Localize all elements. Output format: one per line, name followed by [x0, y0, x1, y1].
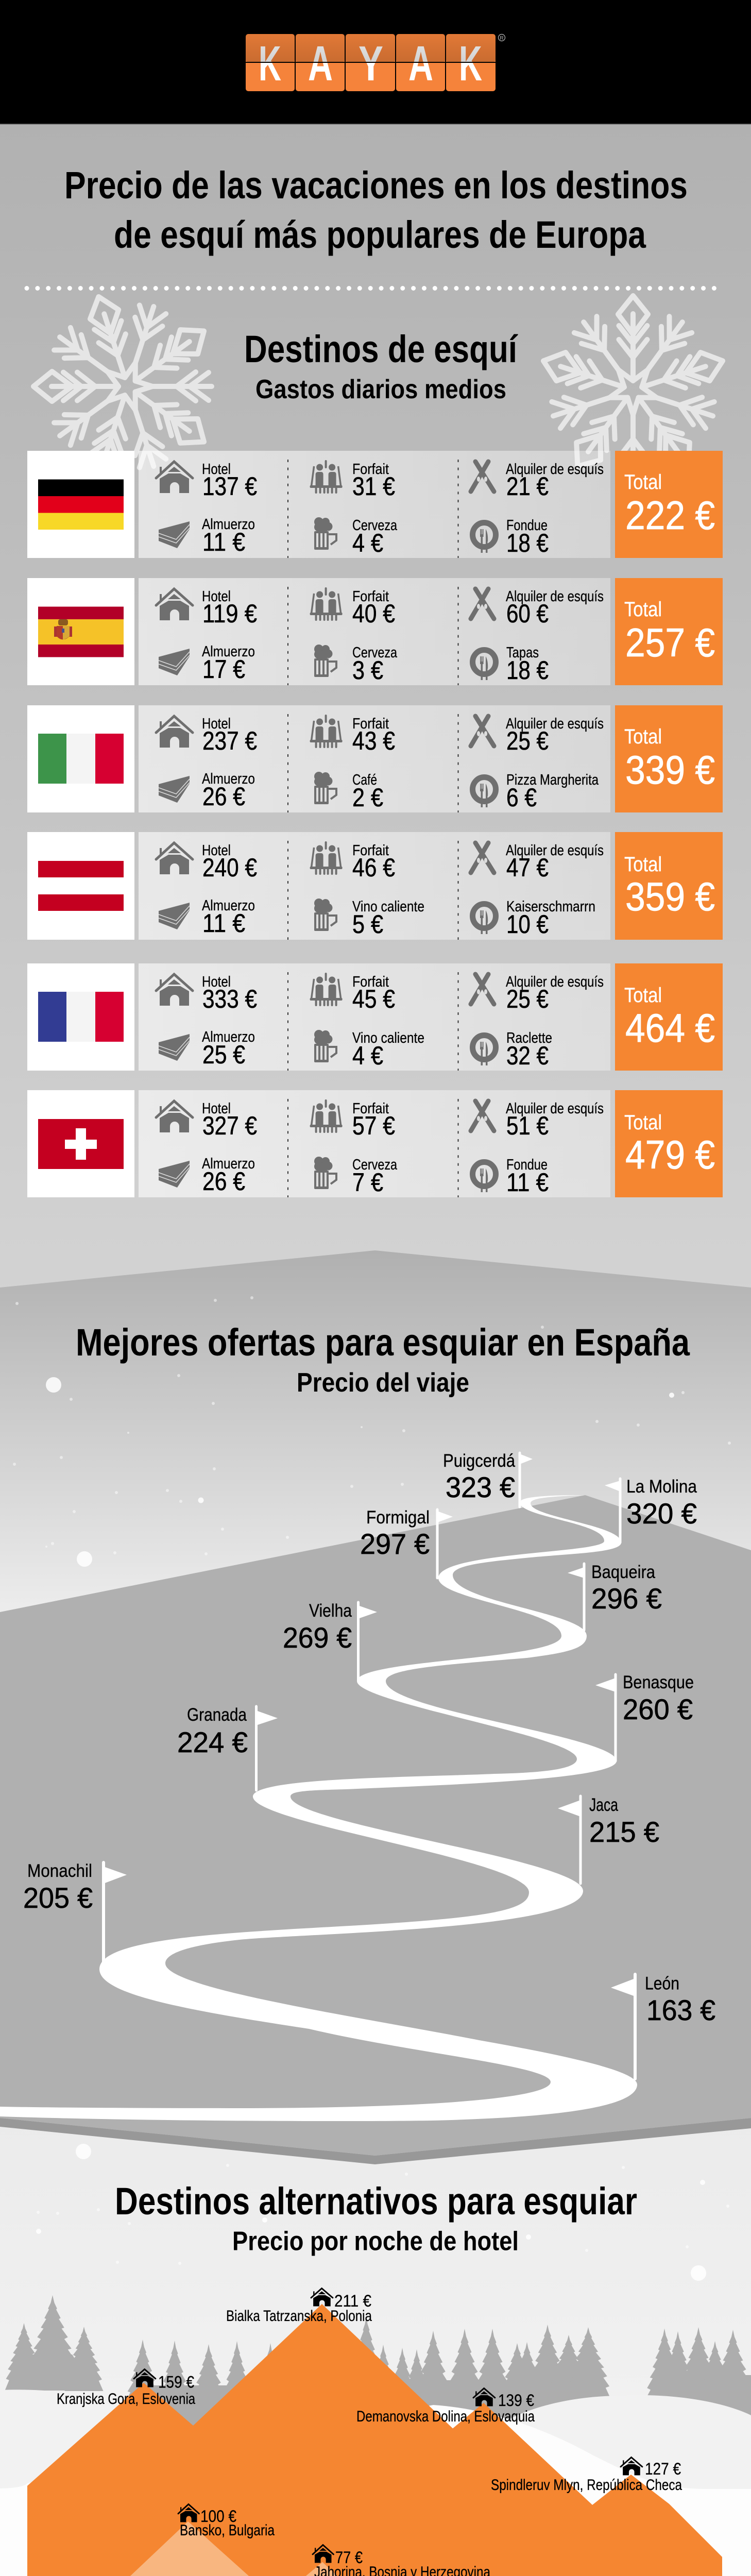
flag: Germany	[38, 479, 124, 530]
heading: alternative destinations	[115, 2180, 637, 2257]
logo: KAYAK tiles: Y	[359, 36, 383, 91]
row: Germany: 4 €	[352, 529, 383, 557]
row: Germany: 18 €	[506, 529, 549, 557]
row: Spain: Almuerzo	[202, 643, 255, 660]
row: France: Forfait	[352, 974, 389, 990]
row: Austria: Kaiserschmarrn	[506, 899, 595, 915]
row: Austria: 47 €	[506, 853, 549, 882]
flag: Baqueira	[568, 1562, 662, 1630]
row: Spain: Alquiler de esquís	[506, 588, 604, 605]
price: Demanovska Dolina: 139 €	[498, 2391, 534, 2410]
row: Switzerland: 26 €	[202, 1167, 245, 1196]
row: Germany: Hotel	[202, 461, 231, 478]
row: Italy	[27, 705, 723, 812]
price: Spindleruv Mlyn: Spindleruv Mlyn, República Checa	[491, 2477, 682, 2494]
total: France	[615, 963, 723, 1071]
row: Spain: Tapas	[506, 645, 539, 661]
main title: de esquí más populares de Europa	[114, 213, 646, 256]
row: Switzerland: 51 €	[506, 1111, 549, 1140]
row: Austria: 11 €	[202, 909, 245, 938]
panel: Spain sky background	[0, 1250, 751, 2156]
flag: Jaca: Jaca	[589, 1795, 618, 1815]
price: Kranjska Gora: 159 €	[158, 2373, 194, 2392]
row: France: 25 €	[202, 1040, 245, 1069]
row: Switzerland: 57 €	[352, 1111, 395, 1140]
row: Germany: Alquiler de esquís	[506, 461, 604, 478]
total: Italy: 339 €	[625, 747, 715, 792]
flag: León: 163 €	[646, 1994, 715, 2026]
row: Switzerland: 11 €	[506, 1168, 549, 1197]
row: Spain: 3 €	[352, 656, 383, 685]
row: France: 333 €	[202, 985, 257, 1013]
row: Spain	[27, 578, 723, 685]
flag: Formigal	[360, 1507, 453, 1578]
flag: Granada: Granada	[187, 1705, 247, 1725]
flag: Vielha: Vielha	[309, 1601, 352, 1621]
flag: Switzerland	[38, 1119, 124, 1169]
row: Switzerland: Alquiler de esquís	[506, 1100, 604, 1117]
row: France: Vino caliente	[352, 1030, 424, 1046]
flag: Austria	[38, 861, 124, 911]
flag: France	[38, 992, 124, 1042]
flag: Benasque: 260 €	[623, 1693, 693, 1725]
icon: left snowflake	[33, 292, 213, 481]
row: Italy: Almuerzo	[202, 771, 255, 787]
heading: ski destinations	[244, 328, 518, 404]
row: France	[27, 963, 723, 1071]
pine forest	[5, 2295, 751, 2442]
total: Italy: Total	[624, 725, 662, 748]
header band with KAYAK logo	[0, 0, 751, 125]
falling snow, lower section	[36, 2144, 729, 2281]
row: Switzerland: Almuerzo	[202, 1156, 255, 1172]
price: Demanovska Dolina	[356, 2388, 535, 2425]
flag: Puigcerdá: Puigcerdá	[443, 1451, 515, 1471]
row: Austria	[27, 832, 723, 940]
heading: ski destinations: Destinos de esquí	[244, 328, 518, 370]
flag: Vielha	[283, 1601, 377, 1681]
flag: Puigcerdá	[443, 1451, 533, 1507]
row: Spain: 18 €	[506, 656, 549, 685]
chart: orange mountains, higher prices	[27, 2304, 722, 2576]
row: Italy: Hotel	[202, 716, 231, 732]
total: Switzerland	[615, 1090, 723, 1197]
row: Switzerland	[27, 1090, 723, 1197]
row: Austria: Hotel	[202, 842, 231, 859]
flag: Jaca	[558, 1795, 659, 1884]
heading: alternative destinations: Precio por noche de hotel	[232, 2227, 519, 2257]
price: Jahorina	[313, 2545, 490, 2576]
row: Germany: 31 €	[352, 472, 395, 501]
total: Austria: Total	[624, 853, 662, 876]
total: Italy	[615, 705, 723, 812]
row: Spain: Forfait	[352, 588, 389, 605]
price: Bialka Tatrzanska: 211 €	[334, 2292, 371, 2310]
row: Italy: 2 €	[352, 783, 383, 812]
logo: KAYAK tiles: K	[259, 36, 281, 91]
row: Spain: Cerveza	[352, 645, 398, 661]
row: Germany: Fondue	[506, 517, 548, 534]
row: Spain: 17 €	[202, 655, 245, 684]
row: Austria: Vino caliente	[352, 899, 424, 915]
row: Spain: 40 €	[352, 599, 395, 628]
row: Italy: 43 €	[352, 726, 395, 755]
row: Germany: 21 €	[506, 472, 549, 501]
flag: Baqueira: 296 €	[591, 1582, 662, 1615]
row: Austria: 46 €	[352, 853, 395, 882]
chart: light orange mountains, lower prices	[27, 2521, 568, 2576]
row: Germany: Almuerzo	[202, 516, 255, 533]
flag: León	[611, 1973, 715, 2079]
total: Germany	[615, 451, 723, 558]
row: Germany	[27, 451, 723, 558]
row: France: Hotel	[202, 974, 231, 990]
row: Switzerland: 327 €	[202, 1111, 257, 1140]
row: Switzerland: 7 €	[352, 1168, 383, 1197]
flag: Benasque: Benasque	[623, 1672, 694, 1692]
price: Kranjska Gora: Kranjska Gora, Eslovenia	[57, 2391, 195, 2408]
flag: Monachil: Monachil	[27, 1861, 92, 1881]
flag: Formigal: 297 €	[360, 1528, 430, 1560]
price: Spindleruv Mlyn	[491, 2458, 682, 2494]
heading: best deals in Spain: Precio del viaje	[297, 1368, 469, 1398]
heading: best deals in Spain	[76, 1321, 690, 1398]
logo: KAYAK tiles: R	[500, 36, 504, 41]
icon: coat of arms	[54, 619, 72, 640]
icon: right snowflake	[539, 296, 727, 475]
row: France: 32 €	[506, 1041, 549, 1070]
row: Austria: Almuerzo	[202, 897, 255, 914]
row: Switzerland: Cerveza	[352, 1157, 398, 1173]
flag: La Molina: La Molina	[626, 1477, 697, 1497]
flag: Benasque	[595, 1672, 694, 1761]
flag: Jaca: 215 €	[589, 1816, 659, 1848]
total: France: Total	[624, 984, 662, 1007]
row: Italy: 237 €	[202, 726, 257, 755]
price: Bialka Tatrzanska	[226, 2289, 372, 2325]
heading: alternative destinations: Destinos alternativos para esquiar	[115, 2180, 637, 2223]
logo: KAYAK tiles: K	[459, 36, 482, 91]
price: Bansko	[178, 2504, 275, 2539]
row: France: Raclette	[506, 1030, 552, 1046]
total: Switzerland: 479 €	[625, 1132, 715, 1177]
row: France: 45 €	[352, 985, 395, 1013]
page background: upper section	[0, 124, 751, 1309]
flag: Puigcerdá: 323 €	[446, 1471, 515, 1503]
price: Demanovska Dolina: Demanovska Dolina, Eslovaquia	[356, 2408, 535, 2425]
logo: KAYAK tiles: A	[308, 36, 333, 91]
falling snow in sky	[13, 1296, 731, 1567]
row: France: Alquiler de esquís	[506, 974, 604, 990]
flag: Monachil	[23, 1861, 127, 1963]
row: Germany: 11 €	[202, 528, 245, 556]
logo: KAYAK tiles	[246, 34, 505, 91]
total: Switzerland: Total	[624, 1111, 662, 1134]
row: Spain: Hotel	[202, 588, 231, 605]
row: Austria: 10 €	[506, 910, 549, 939]
row: Spain: 60 €	[506, 599, 549, 628]
snow hills	[0, 2389, 751, 2576]
main title	[64, 164, 688, 256]
row: France: 4 €	[352, 1041, 383, 1070]
row: Switzerland: Hotel	[202, 1100, 231, 1117]
total: Germany: 222 €	[625, 493, 715, 538]
price: Bansko: Bansko, Bulgaria	[180, 2522, 275, 2539]
ski run ribbon	[0, 1495, 637, 2121]
price: Spindleruv Mlyn: 127 €	[645, 2460, 681, 2478]
row: Italy: Forfait	[352, 716, 389, 732]
total: Austria: 359 €	[625, 874, 715, 919]
row: Italy: 25 €	[506, 726, 549, 755]
logo: KAYAK tiles: A	[408, 36, 433, 91]
flag: Baqueira: Baqueira	[591, 1562, 655, 1582]
row: Switzerland: Forfait	[352, 1100, 389, 1117]
row: Germany: Cerveza	[352, 517, 398, 534]
flag: León: León	[645, 1973, 679, 1994]
row: Italy: Pizza Margherita	[506, 772, 599, 788]
row: Italy: 26 €	[202, 782, 245, 811]
row: Austria: 5 €	[352, 910, 383, 939]
flag: Italy	[38, 734, 124, 784]
page background: lower section	[0, 2112, 751, 2576]
price: Bialka Tatrzanska: Bialka Tatrzanska, Polonia	[226, 2308, 372, 2325]
flag: Granada	[177, 1705, 278, 1790]
row: Italy: Alquiler de esquís	[506, 716, 604, 732]
flag: Spain	[38, 607, 124, 657]
row: France: Almuerzo	[202, 1029, 255, 1045]
flag: La Molina	[605, 1477, 697, 1543]
row: Spain: 119 €	[202, 599, 257, 628]
total: Spain	[615, 578, 723, 685]
flag: Formigal: Formigal	[366, 1507, 430, 1528]
total: Austria	[615, 832, 723, 940]
row: France: 25 €	[506, 985, 549, 1013]
row: Germany: Forfait	[352, 461, 389, 478]
flag: Granada: 224 €	[177, 1726, 248, 1758]
row: Austria: Alquiler de esquís	[506, 842, 604, 859]
row: Austria: Forfait	[352, 842, 389, 859]
total: Germany: Total	[624, 471, 662, 494]
flag: La Molina: 320 €	[626, 1497, 697, 1530]
row: Austria: 240 €	[202, 853, 257, 882]
row: Germany: 137 €	[202, 472, 257, 501]
mountain slope	[0, 1495, 751, 2156]
total: France: 464 €	[625, 1005, 715, 1050]
row: Italy: 6 €	[506, 783, 537, 812]
heading: ski destinations: Gastos diarios medios	[255, 375, 506, 404]
total: Spain: 257 €	[625, 620, 715, 665]
flag: Monachil: 205 €	[23, 1882, 93, 1914]
row: Italy: Café	[352, 772, 377, 788]
flag: Vielha: 269 €	[283, 1621, 352, 1654]
total: Spain: Total	[624, 598, 662, 621]
price: Bansko: 100 €	[200, 2507, 236, 2526]
price: Jahorina: 77 €	[335, 2548, 363, 2567]
price: Kranjska Gora	[57, 2369, 195, 2408]
row: Switzerland: Fondue	[506, 1157, 548, 1173]
